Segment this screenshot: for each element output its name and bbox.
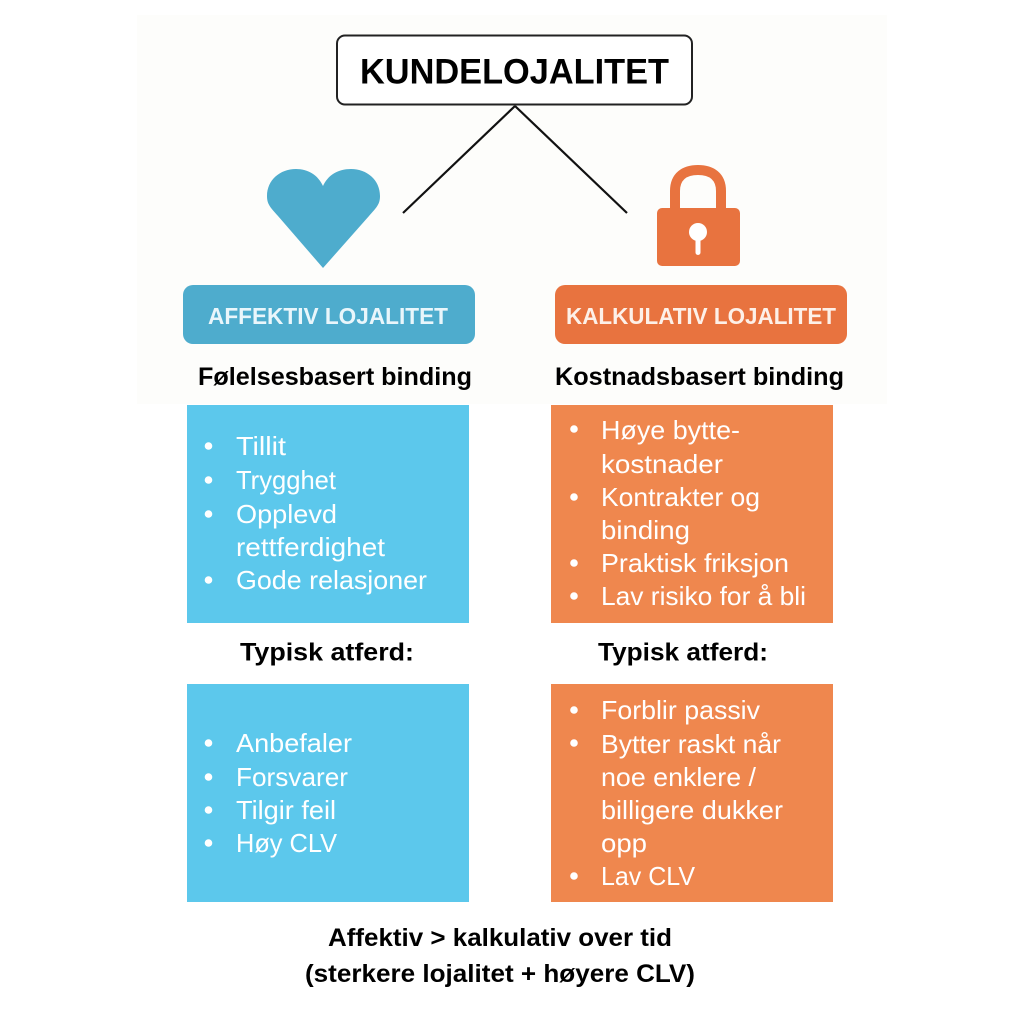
panel: kalkulativ drivers: Kontrakter og <box>601 482 760 512</box>
panel: kalkulativ behaviour: Forblir passiv <box>601 695 760 725</box>
badge: affektiv lojalitet <box>183 285 475 344</box>
panel: affektiv behaviour: Høy CLV <box>236 828 338 858</box>
panel: affektiv behaviour: Anbefaler <box>236 728 352 758</box>
badge: kalkulativ lojalitet <box>555 285 847 344</box>
panel: kalkulativ behaviour: billigere dukker <box>601 795 783 825</box>
panel: affektiv behaviour: Tilgir feil <box>236 795 336 825</box>
icon: padlock <box>657 170 740 266</box>
panel: affektiv drivers: Opplevd <box>236 499 337 529</box>
heading: typisk atferd left: Typisk atferd: <box>240 638 414 666</box>
panel: kalkulativ drivers: Høye bytte- <box>601 415 740 445</box>
panel: affektiv behaviour: Forsvarer <box>236 762 348 792</box>
connector lines <box>403 106 627 213</box>
panel: affektiv drivers: Trygghet <box>236 465 337 495</box>
panel: affektiv drivers: Tillit <box>236 431 287 461</box>
panel: kalkulativ drivers: kostnader <box>601 449 723 479</box>
panel: kalkulativ drivers <box>551 405 833 623</box>
subheading: følelsesbasert binding: Følelsesbasert binding <box>198 363 472 391</box>
badge: affektiv lojalitet: AFFEKTIV LOJALITET <box>208 303 448 329</box>
title box <box>337 36 692 104</box>
panel: kalkulativ drivers: Praktisk friksjon <box>601 548 789 578</box>
conclusion text <box>305 924 695 988</box>
heading: typisk atferd right: Typisk atferd: <box>598 638 768 666</box>
conclusion text: (sterkere lojalitet + høyere CLV) <box>305 960 695 988</box>
panel: kalkulativ behaviour <box>551 684 833 902</box>
conclusion text: Affektiv > kalkulativ over tid <box>328 924 672 952</box>
panel: top background <box>137 15 887 404</box>
title box: KUNDELOJALITET <box>360 52 669 92</box>
panel: kalkulativ drivers: Lav risiko for å bli <box>601 581 806 611</box>
panel: affektiv drivers: Gode relasjoner <box>236 565 427 595</box>
panel: kalkulativ behaviour: noe enklere / <box>601 762 757 792</box>
panel: kalkulativ behaviour: Bytter raskt når <box>601 729 781 759</box>
panel: affektiv drivers: rettferdighet <box>236 532 386 562</box>
panel: kalkulativ drivers: binding <box>601 515 690 545</box>
subheading: kostnadsbasert binding: Kostnadsbasert binding <box>555 363 844 391</box>
panel: kalkulativ behaviour: Lav CLV <box>601 861 696 891</box>
badge: kalkulativ lojalitet: KALKULATIV LOJALITET <box>566 303 836 329</box>
panel: affektiv behaviour <box>187 684 469 902</box>
panel: kalkulativ behaviour: opp <box>601 828 647 858</box>
panel: affektiv drivers <box>187 405 469 623</box>
icon: heart <box>267 169 380 268</box>
